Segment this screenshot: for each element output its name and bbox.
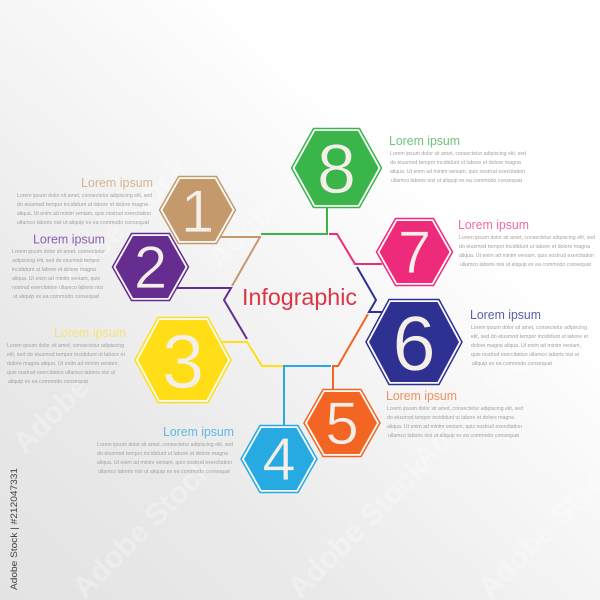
text block 3: Lorem ipsum dolor sit amet, consectetur adipiscing (7, 343, 124, 349)
connector: purple (175, 288, 247, 339)
text block 2: nostrud exercitation ullamco laboris nisi (12, 285, 103, 291)
hexagon 7 (376, 218, 452, 286)
connector: green (261, 206, 327, 234)
text block 4: do eiusmod tempor incididunt ut labore et dolore magna (97, 451, 228, 457)
hexagon 3: 3 (162, 320, 204, 405)
text block 5 (386, 388, 523, 439)
text block 6: Lorem ipsum dolor sit amet, consectetur adipiscing (471, 325, 587, 331)
text block 3: quis nostrud exercitation ullamco laboris nisi ut (7, 370, 116, 376)
hexagon 2 (112, 234, 188, 301)
text block 2: aliqua. Ut enim ad minim veniam, quis (12, 276, 100, 282)
hexagon 5: 5 (325, 390, 359, 457)
text block 4 (97, 424, 234, 475)
text block 6: elit, sed do eiusmod tempor incididunt ut labore et (471, 334, 589, 340)
text block 8: Lorem ipsum (389, 133, 460, 148)
text block 4: ullamco laboris nisi ut aliquip ex ea commodo consequat (98, 469, 231, 475)
text block 2 (12, 232, 105, 300)
hexagon 4 (241, 426, 317, 493)
hexagon 3 (135, 318, 231, 405)
text block 1: Lorem ipsum (81, 175, 153, 190)
connector: orange (333, 314, 368, 391)
text block 6 (470, 307, 589, 367)
text block 7: Lorem ipsum dolor sit amet, consectetur adipiscing elit, sed (459, 235, 595, 241)
text block 6: quis nostrud exercitation ullamco laboris nisi ut (471, 352, 580, 358)
watermarks: Adobe Stock (42, 152, 195, 305)
connector: blue (284, 366, 331, 427)
text block 7: do eiusmod tempor incididunt ut labore et dolore magna (459, 244, 590, 250)
text block 3: aliquip ex ea commodo consequat (8, 379, 89, 385)
text block 7 (458, 217, 595, 268)
watermarks: Adobe (7, 371, 96, 460)
text block 3: dolore magna aliqua. Ut enim ad minim veniam, (7, 361, 119, 367)
hexagon 1 (160, 176, 236, 245)
text block 6: aliquip ex ea commodo consequat (472, 361, 553, 367)
connector: tan (220, 237, 260, 286)
text block 7: ullamco laboris nisi ut aliquip ex ea commodo consequat (460, 262, 592, 268)
text block 2: ut aliquip ex ea commodo consequat (13, 294, 100, 300)
text block 3: Lorem ipsum (54, 325, 126, 340)
text block 8 (389, 133, 526, 184)
text block 2: adipiscing elit, sed do eiusmod tempor (12, 258, 100, 264)
text block 8: do eiusmod tempor incididunt ut labore et dolore magna (390, 160, 521, 166)
hexagon 7: 7 (398, 219, 431, 286)
text block 1: do eiusmod tempor incididunt ut labore et dolore magna (17, 202, 148, 208)
hexagon 5 (304, 390, 380, 457)
hexagon 2: 2 (134, 234, 167, 301)
text block 2: Lorem ipsum dolor sit amet, consectetur (12, 249, 105, 255)
text block 8: Lorem ipsum dolor sit amet, consectetur adipiscing elit, sed (390, 151, 526, 157)
hexagon 8 (292, 128, 382, 208)
text block 5: ullamco laboris nisi ut aliquip ex ea commodo consequat (388, 433, 520, 439)
connector: pink (329, 234, 382, 264)
text block 3: elit, sed do eiusmod tempor incididunt ut labore et (7, 352, 126, 358)
text block 1: ullamco laboris nisi ut aliquip ex ea commodo consequat (17, 220, 150, 226)
text block 1: Lorem ipsum dolor sit amet, consectetur adipiscing elit, sed (17, 193, 152, 199)
hexagon 4: 4 (262, 426, 296, 493)
text block 1: aliqua. Ut enim ad minim veniam, quis nostrud exercitation (17, 211, 151, 217)
hexagon 8: 8 (317, 130, 356, 208)
text block 2: incididunt ut labore et dolore magna (12, 267, 96, 273)
text block 3 (7, 325, 126, 385)
watermarks: Adobe Stock (407, 322, 560, 475)
text block 2: Lorem ipsum (33, 232, 105, 246)
text block 4: Lorem ipsum (163, 424, 234, 439)
center title: Infographic (242, 284, 357, 310)
text block 4: aliqua. Ut enim ad minim veniam, quis nostrud exercitation (97, 460, 232, 466)
text block 5: Lorem ipsum dolor sit amet, consectetur adipiscing elit, sed (387, 406, 523, 412)
text block 5: aliqua. Ut enim ad minim veniam, quis nostrud exercitation (387, 424, 522, 430)
text block 7: aliqua. Ut enim ad minim veniam, quis nostrud exercitation (459, 253, 594, 259)
text block 6: dolore magna aliqua. Ut enim ad minim veniam, (471, 343, 581, 349)
watermarks: Adobe (202, 186, 291, 275)
connector: yellow (220, 342, 283, 366)
text block 8: ullamco laboris nisi ut aliquip ex ea commodo consequat (391, 178, 523, 184)
text block 8: aliqua. Ut enim ad minim veniam, quis nostrud exercitation (390, 169, 525, 175)
hexagon 1: 1 (181, 178, 214, 245)
stock id stamp: Adobe Stock | #212047331 (9, 468, 19, 590)
text block 5: do eiusmod tempor incididunt ut labore et dolore magna (387, 415, 514, 421)
hexagon 6: 6 (392, 299, 436, 387)
connector: navy (357, 267, 385, 312)
text block 6: Lorem ipsum (470, 307, 541, 322)
text block 4: Lorem ipsum dolor sit amet, consectetur adipiscing elit, sed (97, 442, 233, 448)
text block 5: Lorem ipsum (386, 388, 457, 403)
text block 7: Lorem ipsum (458, 217, 529, 232)
text block 1 (17, 175, 153, 226)
hexagon 6 (366, 299, 462, 387)
